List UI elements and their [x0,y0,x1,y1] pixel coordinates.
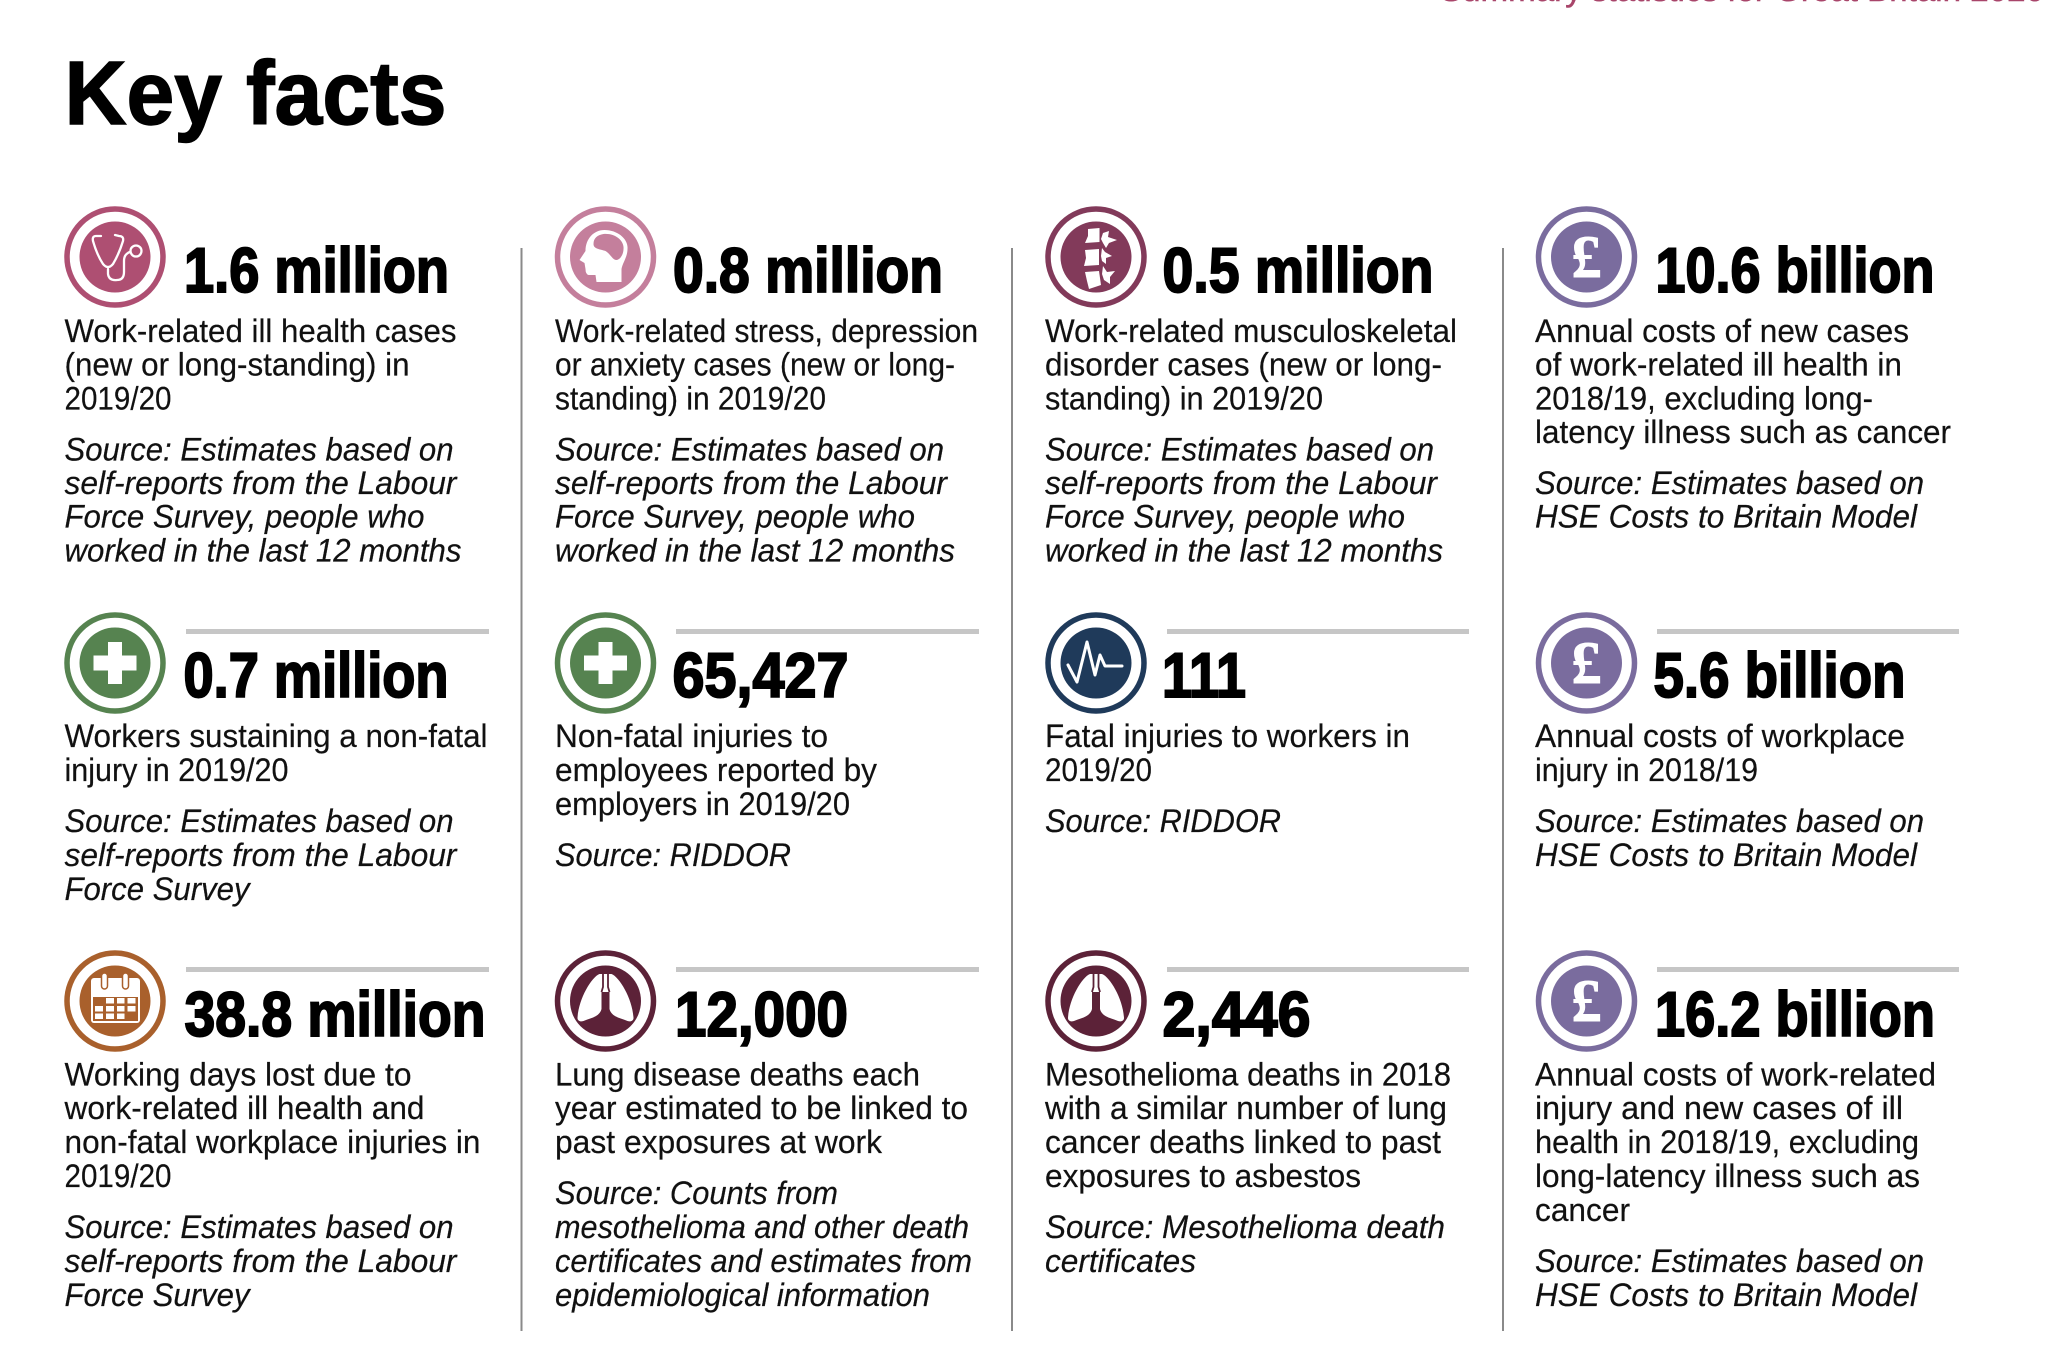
source: Force Survey, people who [555,499,915,535]
description [1044,1056,1451,1194]
source: self-reports from the Labour [64,1243,458,1279]
description: 2018/19, excluding long- [1535,380,1873,416]
value: 0.8 million [673,236,943,306]
description: health in 2018/19, excluding [1535,1124,1919,1160]
icon: pound: £ [1572,968,1602,1034]
description: long-latency illness such as [1535,1158,1920,1194]
source: Source: Estimates based on [1535,803,1924,839]
value: 38.8 million [184,980,486,1050]
description: injury in 2018/19 [1535,752,1758,788]
source [1045,432,1443,568]
description: disorder cases (new or long- [1045,347,1442,383]
description: Lung disease deaths each [555,1056,920,1092]
source: worked in the last 12 months [555,532,955,568]
source: Source: Mesothelioma death [1045,1209,1445,1245]
description: standing) in 2019/20 [1045,380,1323,416]
description [1535,313,1951,450]
description: with a similar number of lung [1044,1090,1447,1126]
description: exposures to asbestos [1045,1158,1361,1194]
source: Force Survey [64,1277,251,1313]
description: 2019/20 [64,1158,172,1194]
panel: ill health cases [64,209,462,568]
description [64,1056,480,1194]
description: Fatal injuries to workers in [1045,718,1410,754]
icon: head with brain [558,209,654,305]
description [64,313,456,416]
source: epidemiological information [555,1277,930,1313]
description: Mesothelioma deaths in 2018 [1045,1056,1451,1092]
value: 12,000 [675,980,848,1050]
panel: mesothelioma deaths [1044,953,1469,1279]
description [1535,1056,1936,1228]
source: HSE Costs to Britain Model [1535,499,1918,535]
source: self-reports from the Labour [64,465,458,501]
panel: cost of ill health [1535,209,1951,535]
description: year estimated to be linked to [555,1090,968,1126]
source [64,803,458,907]
value: 10.6 billion [1656,236,1934,306]
source: Force Survey, people who [64,499,424,535]
panel: lung disease deaths [555,953,979,1313]
description: (new or long-standing) in [64,347,410,383]
source: worked in the last 12 months [1045,532,1443,568]
source: Source: Estimates based on [64,803,454,839]
source: Source: RIDDOR [555,837,791,873]
description: or anxiety cases (new or long- [555,347,955,383]
value: 65,427 [672,641,848,711]
source: Source: Estimates based on [64,1209,454,1245]
description: Non-fatal injuries to [555,718,828,754]
source: worked in the last 12 months [64,532,462,568]
description: employers in 2019/20 [555,786,850,822]
panel: cost of workplace injury [1535,615,1959,873]
panel: non-fatal injury RIDDOR [555,615,979,873]
source: HSE Costs to Britain Model [1535,1277,1918,1313]
description: 2019/20 [64,380,172,416]
description: work-related ill health and [64,1090,424,1126]
icon: pound [1538,209,1634,305]
source [1535,465,1924,535]
source: Source: Counts from [555,1175,838,1211]
panel: musculoskeletal disorder [1045,209,1457,568]
description [64,718,488,788]
value: 0.5 million [1162,236,1434,306]
icon: pound: £ [1572,224,1602,290]
description [555,313,978,416]
description: of work-related ill health in [1535,347,1902,383]
source: HSE Costs to Britain Model [1535,837,1918,873]
icon: heartbeat [1048,615,1144,711]
value: 0.7 million [184,641,448,711]
panel: stress depression anxiety [555,209,978,568]
description: Annual costs of new cases [1535,313,1909,349]
panel: fatal injuries [1045,615,1469,839]
icon: green cross [67,615,163,711]
source: certificates [1045,1243,1196,1279]
source: Force Survey [64,871,251,907]
value: 111 [1162,641,1246,711]
source [555,432,955,568]
source: Source: RIDDOR [1045,803,1281,839]
icon: pound: £ [1572,630,1602,696]
source [555,1175,972,1313]
description: non-fatal workplace injuries in [64,1124,480,1160]
source [64,432,462,568]
description [1535,718,1905,788]
title: Key facts [64,44,446,144]
description: Work-related musculoskeletal [1045,313,1457,349]
source [1535,803,1924,873]
description: standing) in 2019/20 [555,380,826,416]
description [555,718,877,822]
icon: pound [1538,615,1634,711]
source: Source: Estimates based on [1535,465,1924,501]
source: Source: Estimates based on [1045,432,1434,468]
source: self-reports from the Labour [1045,465,1438,501]
value: 5.6 billion [1654,641,1906,711]
description: past exposures at work [555,1124,883,1160]
description: Annual costs of work-related [1535,1056,1936,1092]
source [64,1209,458,1313]
icon: pound [1538,953,1634,1049]
description: cancer [1535,1192,1630,1228]
description [1045,718,1410,788]
description: Work-related stress, depression [555,313,978,349]
source: Source: Estimates based on [555,432,944,468]
description: 2019/20 [1045,752,1152,788]
icon: green cross [558,615,654,711]
source: mesothelioma and other death [555,1209,969,1245]
description [1045,313,1457,416]
panel: working days lost [64,953,489,1313]
icon: spine vertebrae [1048,209,1144,305]
icon: lungs [558,953,654,1049]
icon: lungs [1048,953,1144,1049]
description: latency illness such as cancer [1535,414,1951,450]
source: self-reports from the Labour [64,837,458,873]
panel: cost of injury and ill health [1535,953,1959,1313]
description: Workers sustaining a non-fatal [64,718,488,754]
description: Work-related ill health cases [64,313,456,349]
description: Working days lost due to [64,1056,412,1092]
panel: non-fatal injury self-reported [64,615,489,907]
description [555,1056,968,1160]
value: 1.6 million [184,236,449,306]
description: injury and new cases of ill [1535,1090,1903,1126]
source: Source: Estimates based on [64,432,454,468]
value: 16.2 billion [1655,980,1935,1050]
source: Source: Estimates based on [1535,1243,1924,1279]
source: certificates and estimates from [555,1243,972,1279]
description: employees reported by [555,752,877,788]
icon: calendar [67,953,163,1049]
description: injury in 2019/20 [64,752,288,788]
description: cancer deaths linked to past [1045,1124,1441,1160]
source: self-reports from the Labour [555,465,948,501]
source [1535,1243,1924,1313]
source: Force Survey, people who [1045,499,1405,535]
value: 2,446 [1162,980,1310,1050]
description: Annual costs of workplace [1535,718,1905,754]
source [1045,1209,1445,1279]
icon: stethoscope [67,209,163,305]
